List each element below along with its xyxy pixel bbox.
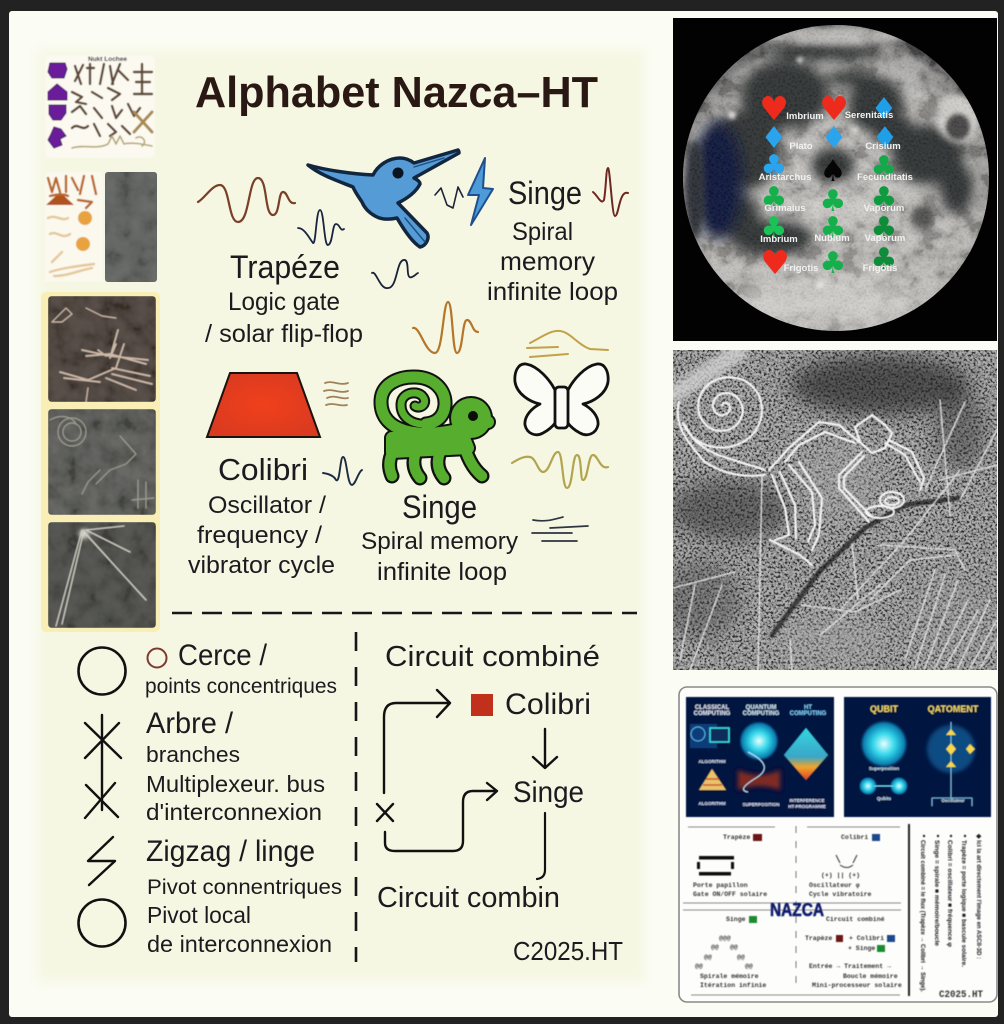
text: Colibri block: Colibri xyxy=(218,452,308,487)
text: Pivot local: de interconnexion xyxy=(147,931,332,957)
table cell: Circuit combiné xyxy=(805,916,902,989)
text: Colibri block xyxy=(188,452,335,579)
table cell: Trapèze: Gate ON/OFF solaire xyxy=(693,891,767,898)
suit markers: ♦ xyxy=(821,121,847,156)
moon labels xyxy=(759,110,913,274)
text: Zigzag: Pivot connentriques xyxy=(147,875,342,899)
suit markers: ♥ xyxy=(760,243,790,282)
vertical notes: Colibri = oscillateur ■ fréquence φ xyxy=(946,840,953,947)
table cell: Colibri xyxy=(809,834,880,898)
panel: computing comparison: HT-PROGRAMME xyxy=(788,804,826,809)
icon: butterfly xyxy=(515,364,608,435)
text: Arbre: branches xyxy=(146,742,240,767)
moon labels: Fecunditatis xyxy=(857,172,913,183)
text: Arbre xyxy=(146,707,325,825)
suit markers: ♥ xyxy=(759,89,789,128)
title: Alphabet Nazca–HT xyxy=(195,68,598,117)
icon: colibri bird xyxy=(308,150,459,247)
label: Singe: Singe xyxy=(513,776,584,809)
table cell: Colibri: (+) || (+) xyxy=(821,872,860,879)
label: Circuit combin: Circuit combin xyxy=(377,882,560,914)
text: Cerce xyxy=(145,639,337,698)
panel: computing comparison: ALGORITHM xyxy=(698,801,726,806)
icon: circle xyxy=(78,648,126,694)
moon labels: Grimaius xyxy=(764,203,806,214)
thumbnail: grey stone xyxy=(105,172,157,282)
suit markers xyxy=(759,89,898,282)
panel: yellow photo strip xyxy=(41,292,160,632)
table cell: Singe xyxy=(695,916,766,989)
credit: C2025.HT small: C2025.HT xyxy=(939,989,983,1001)
text: Singe lower block: Singe xyxy=(402,489,477,525)
text: Trapéze block: / solar flip-flop xyxy=(205,320,363,348)
panel: computing comparison: CLASSICAL xyxy=(695,705,729,711)
moon labels: Frigotis xyxy=(863,263,897,274)
text: Pivot local: Pivot local xyxy=(147,902,251,928)
panel: computing comparison: QUANTUM xyxy=(746,705,776,711)
moon labels: Crisium xyxy=(865,141,901,152)
table cell: Singe: @@@ xyxy=(719,935,731,942)
table cell: Circuit combiné: + Singe xyxy=(848,945,875,952)
icon: lightning bolt xyxy=(468,158,493,225)
text: Singe upper block: memory xyxy=(500,246,595,276)
table cell: Circuit combiné: + Colibri xyxy=(849,935,884,942)
vertical notes: ◆ Ici la art directement l'image en ASCII-3D : xyxy=(975,833,982,959)
thumbnail: glyph sheet xyxy=(45,55,155,158)
suit markers: ♣ xyxy=(761,181,787,216)
arrow: top branch xyxy=(384,690,450,793)
vertical notes: Circuit combiné = le flux (Trapèze → Colibri → Singe). xyxy=(919,840,926,992)
table cell: Colibri: Oscillateur φ xyxy=(809,882,860,889)
panel: computing comparison: ALGORITHM xyxy=(698,759,726,764)
moon labels: Plato xyxy=(789,141,813,152)
waves: decorative signal traces xyxy=(198,168,628,541)
arrow: Colibri to Singe xyxy=(533,729,557,768)
suit markers: ♣ xyxy=(820,246,846,281)
credit: C2025.HT: C2025.HT xyxy=(513,936,623,966)
panel: computing comparison: HT xyxy=(804,705,812,711)
panel: computing comparison xyxy=(686,697,834,817)
moon labels: Vaporum xyxy=(864,203,904,214)
panel: thumbnail column xyxy=(41,55,160,632)
suit markers: ♣ xyxy=(871,211,897,246)
icon: cross xyxy=(377,804,393,821)
panel: glyph legend xyxy=(78,639,342,957)
icon: red square xyxy=(471,694,493,716)
suit markers: ♣ xyxy=(761,211,787,246)
vertical notes: Trapèze = porte logique ■ bascule solaire. xyxy=(960,840,967,967)
suit markers: ♣ xyxy=(871,181,897,216)
table cell: Singe: @@ xyxy=(695,963,703,970)
text: Arbre: d'interconnexion xyxy=(146,799,322,825)
table cell: Circuit combiné: Trapèze xyxy=(805,935,832,942)
panel: ascii table xyxy=(683,824,983,1001)
dark ravine xyxy=(772,498,959,635)
icon: small ring xyxy=(148,648,166,668)
panel: computing comparison: COMPUTING xyxy=(790,711,827,717)
table cell: Circuit combiné: Circuit combiné xyxy=(826,916,885,923)
suit markers: ♦ xyxy=(761,121,787,156)
panel: combined circuit diagram xyxy=(377,641,623,966)
vertical notes: Singe = spirale ■ mémoire/boucle xyxy=(933,840,940,946)
text: Trapéze block: Logic gate xyxy=(228,288,340,316)
panel: computing comparison: COMPUTING xyxy=(694,711,731,717)
panel: computing comparison: COMPUTING xyxy=(743,711,780,717)
label: Colibri: Colibri xyxy=(505,688,591,721)
text: Colibri block: Oscillator / xyxy=(208,492,326,519)
table cell: Singe: @@ xyxy=(711,944,719,951)
icon: zigzag xyxy=(88,837,115,885)
table cell: Circuit combiné: Boucle mémoire xyxy=(843,973,898,980)
text: Singe lower block: infinite loop xyxy=(377,558,507,586)
icon: tree branches xyxy=(85,715,121,818)
suit markers: ♠ xyxy=(820,154,846,189)
panel: qubit vs qatoment: QUBIT xyxy=(870,704,898,714)
text: Singe upper block: infinite loop xyxy=(487,278,618,306)
table cell: Singe: @@ xyxy=(745,963,753,970)
text: Zigzag xyxy=(146,835,342,899)
text: Singe lower block xyxy=(361,489,518,586)
panel: alphabet poster background xyxy=(38,50,644,982)
suit markers: ♣ xyxy=(820,211,846,246)
panel: computing comparison: SUPERPOSITION xyxy=(742,802,780,807)
text: Arbre: Multiplexeur. bus xyxy=(146,771,325,797)
heading: Circuit combiné: Circuit combiné xyxy=(385,641,600,673)
panel: monkey geoglyph photo xyxy=(660,348,1000,670)
table cell: Trapèze: Trapèze xyxy=(723,834,750,841)
suit markers: ♣ xyxy=(761,149,787,184)
arrow: lower branch xyxy=(385,783,497,851)
suit markers: ♣ xyxy=(871,242,897,277)
table cell: Trapèze: Porte papillon xyxy=(693,882,748,889)
panel: qubit vs qatoment: Superposition xyxy=(869,766,899,771)
table cell: Circuit combiné: Mini-processeur solaire xyxy=(812,982,902,989)
text: Singe upper block: Singe xyxy=(508,175,582,211)
straight Nazca lines xyxy=(673,400,997,670)
badge: NAZCA: NAZCA xyxy=(770,900,824,920)
table cell: Singe: @@ xyxy=(730,944,738,951)
text: Cerce: Cerce / xyxy=(178,639,268,672)
thumbnail: orange glyphs xyxy=(45,172,103,282)
photo: condor lines xyxy=(48,296,156,402)
moon labels: Vaporum xyxy=(865,233,905,244)
text: Cerce: points concentriques xyxy=(145,675,337,698)
suit markers: ♦ xyxy=(871,92,897,127)
icon: red trapezoid xyxy=(207,373,320,437)
text: Singe upper block: Spiral xyxy=(512,218,573,246)
panel: qubit vs qatoment: Qubits xyxy=(877,796,892,801)
table cell: Singe: Itération infinie xyxy=(700,982,766,989)
text: Colibri block: vibrator cycle xyxy=(188,552,335,579)
table cell: Singe: @@ xyxy=(737,954,745,961)
table cell: Singe: Spirale mémoire xyxy=(700,973,759,980)
text: Singe upper block xyxy=(487,175,618,306)
panel: qubit vs qatoment xyxy=(844,697,991,817)
text: Trapéze block xyxy=(205,249,363,348)
icon: circle pivot xyxy=(78,900,126,946)
suit markers: ♣ xyxy=(871,150,897,185)
suit markers: ♦ xyxy=(872,121,898,156)
vertical notes xyxy=(919,833,982,992)
moon labels: Nubium xyxy=(814,233,850,244)
text: Pivot local xyxy=(147,902,332,957)
spiral and monkey outline xyxy=(678,377,924,565)
table cell: Circuit combiné: Entrée → Traitement → xyxy=(809,963,891,970)
moon labels: Frigotis xyxy=(784,263,818,274)
table cell: Trapèze xyxy=(693,834,767,898)
suit markers: ♣ xyxy=(820,184,846,219)
moon surface xyxy=(683,25,989,331)
table cell: Singe: @@ xyxy=(704,954,712,961)
thumbnail: glyph sheet: Nukt Lochee xyxy=(88,56,127,63)
text: Arbre: Arbre / xyxy=(146,707,234,740)
icon: green spiral monkey xyxy=(381,377,494,478)
text: Trapéze block: Trapéze xyxy=(230,249,340,285)
text: Zigzag: Zigzag / linge xyxy=(146,835,315,868)
panel: qubit vs qatoment: QATOMENT xyxy=(928,704,979,714)
panel: moon map xyxy=(673,18,997,341)
moon labels: Aristarchus xyxy=(759,172,811,183)
text: Colibri block: frequency / xyxy=(197,522,322,549)
suit markers: ♥ xyxy=(819,89,849,128)
moon labels: Imbrium xyxy=(760,234,798,245)
panel: qubit vs qatoment: Oscillateur xyxy=(941,798,965,803)
panel: computing comparison: INTERFERENCE xyxy=(789,798,825,803)
connector: Singe to output xyxy=(537,813,545,879)
photo: long bird lines xyxy=(48,522,156,628)
table cell: Colibri: Colibri xyxy=(841,834,868,841)
table cell: Colibri: Cycle vibratoire xyxy=(809,891,872,898)
text: Singe lower block: Spiral memory xyxy=(361,528,518,555)
moon labels: Imbrium xyxy=(786,111,824,122)
panel: reference card xyxy=(679,687,997,1002)
table cell: Singe: Singe xyxy=(726,916,746,923)
photo: monkey lines xyxy=(48,409,156,515)
moon labels: Serenitatis xyxy=(845,110,893,121)
